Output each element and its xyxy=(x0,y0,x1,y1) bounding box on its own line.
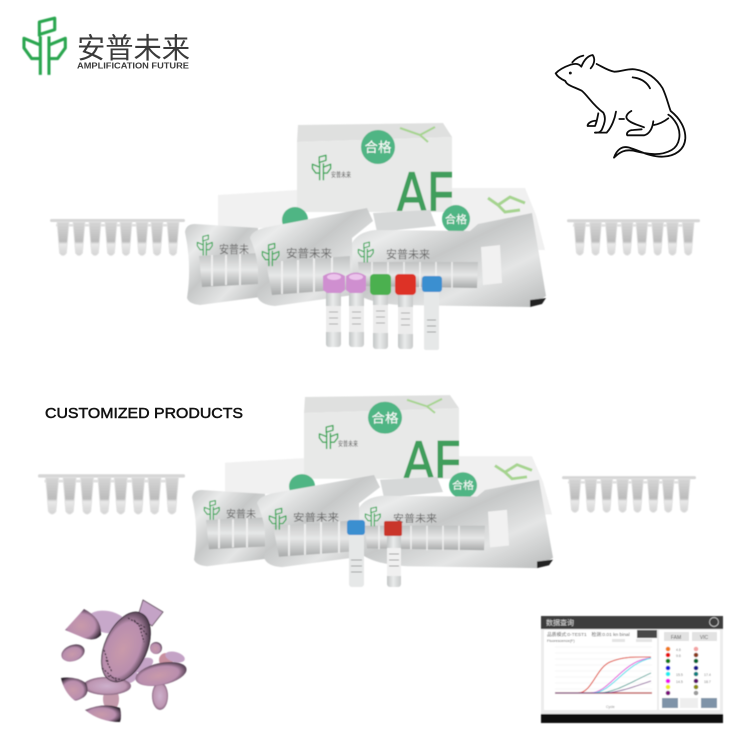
cell horizontal xyxy=(83,677,131,695)
cell lower middle xyxy=(118,668,140,686)
top bar xyxy=(541,616,723,629)
vial green xyxy=(370,274,391,349)
badge: sheet right lower: 合格 xyxy=(452,479,474,492)
chart panel: Fluorescence(F) xyxy=(547,639,575,643)
side panel xyxy=(659,630,720,710)
tube strip top right xyxy=(567,219,700,255)
cell upper left xyxy=(65,609,101,639)
microscopy image: bacteria xyxy=(59,600,189,722)
badge: pass lower xyxy=(368,402,402,434)
foil pouch flap xyxy=(373,210,436,232)
logo Chinese wordmark: 安普未来 xyxy=(77,33,190,65)
badge: pass lower: 合格 xyxy=(372,411,398,425)
cell right back 2 xyxy=(164,650,186,664)
vial red lower xyxy=(384,521,402,587)
foil pouch left: 安普未 xyxy=(219,242,249,256)
chart panel: 品质模式:0-TEST1 检测:0.01 kn binal xyxy=(547,631,630,638)
foil pouch left xyxy=(185,224,260,305)
vial blue xyxy=(422,276,442,350)
top bar: 数据查询 xyxy=(546,618,574,627)
cell large xyxy=(92,605,160,689)
chart panel: Cycle xyxy=(606,705,615,709)
foil pouch left lower xyxy=(192,490,267,566)
cell right back xyxy=(159,653,173,667)
side panel: 14.5 xyxy=(676,680,683,684)
box logo: 安普未来 xyxy=(331,170,351,179)
cell right large xyxy=(133,658,189,690)
box logo lower xyxy=(319,425,358,449)
back sheet right xyxy=(450,188,545,250)
cell lower right xyxy=(152,682,168,710)
foil pouch middle lower: 安普未来 xyxy=(293,511,339,524)
foil pouch middle lower xyxy=(257,475,380,567)
foil pouch right lower xyxy=(356,480,553,568)
back sheet left lower xyxy=(225,458,307,494)
foil pouch middle xyxy=(250,208,373,306)
nav buttons xyxy=(662,698,717,708)
kit box xyxy=(296,122,453,213)
foil pouch right lower: 安普未来 xyxy=(393,512,437,525)
vial blue lower xyxy=(347,520,365,587)
foil pouch right: 安普未来 xyxy=(386,247,430,261)
cell bottom stub xyxy=(103,687,119,711)
android nav bar xyxy=(541,714,723,723)
vial red xyxy=(395,274,416,349)
badge: sheet left lower xyxy=(289,474,315,499)
foil pouch middle: 安普未来 xyxy=(286,246,332,260)
cell centre right xyxy=(129,654,155,676)
badge: sheet right lower xyxy=(449,472,477,499)
side panel: 17.4 xyxy=(704,673,711,677)
cell top right xyxy=(138,600,163,626)
screen background xyxy=(541,616,723,723)
tube strip lower right xyxy=(562,476,696,512)
foil pouch right xyxy=(350,213,546,307)
badge: sheet right: 合格 xyxy=(445,212,467,226)
foil pouch flap lower xyxy=(380,477,443,498)
cell back xyxy=(85,608,129,636)
cell left small xyxy=(59,641,87,665)
icon: rat line drawing xyxy=(556,55,685,158)
kit box lower xyxy=(304,394,460,480)
box AF mark lower: AF xyxy=(403,430,463,493)
heading: CUSTOMIZED PRODUCTS xyxy=(45,405,243,422)
side panel: 4.6 xyxy=(676,648,681,652)
side panel: FAM xyxy=(671,635,681,641)
chart panel xyxy=(544,630,657,710)
box logo xyxy=(312,155,351,180)
side panel: 15.5 xyxy=(676,673,683,677)
side panel: 18.7 xyxy=(704,680,711,684)
vial purple 1 xyxy=(323,272,345,347)
badge: sheet right xyxy=(442,205,470,233)
box logo lower: 安普未来 xyxy=(338,439,358,448)
product kit top xyxy=(185,123,546,350)
side panel: 9.6 xyxy=(676,654,681,658)
back sheet right lower xyxy=(457,456,552,514)
side panel: VIC xyxy=(700,635,709,641)
cell small round xyxy=(150,642,162,654)
icon: green plant logo xyxy=(24,18,65,75)
box AF mark: AF xyxy=(396,160,456,227)
tube strip lower left xyxy=(38,474,185,514)
cell bottom xyxy=(85,705,121,722)
logo English wordmark: AMPLIFICATION FUTURE xyxy=(77,60,189,70)
foil pouch left lower: 安普未 xyxy=(226,508,256,520)
badge: pass xyxy=(361,130,395,164)
logo xyxy=(24,18,190,75)
badge: sheet left xyxy=(282,207,308,233)
back sheet left xyxy=(218,190,300,228)
vial purple 2 xyxy=(346,272,366,347)
product kit lower xyxy=(192,395,553,587)
badge: pass: 合格 xyxy=(364,140,392,155)
tube strip top left xyxy=(50,219,185,256)
software screenshot xyxy=(541,616,723,723)
cell lower left xyxy=(61,678,88,701)
cell speckle xyxy=(102,618,148,682)
